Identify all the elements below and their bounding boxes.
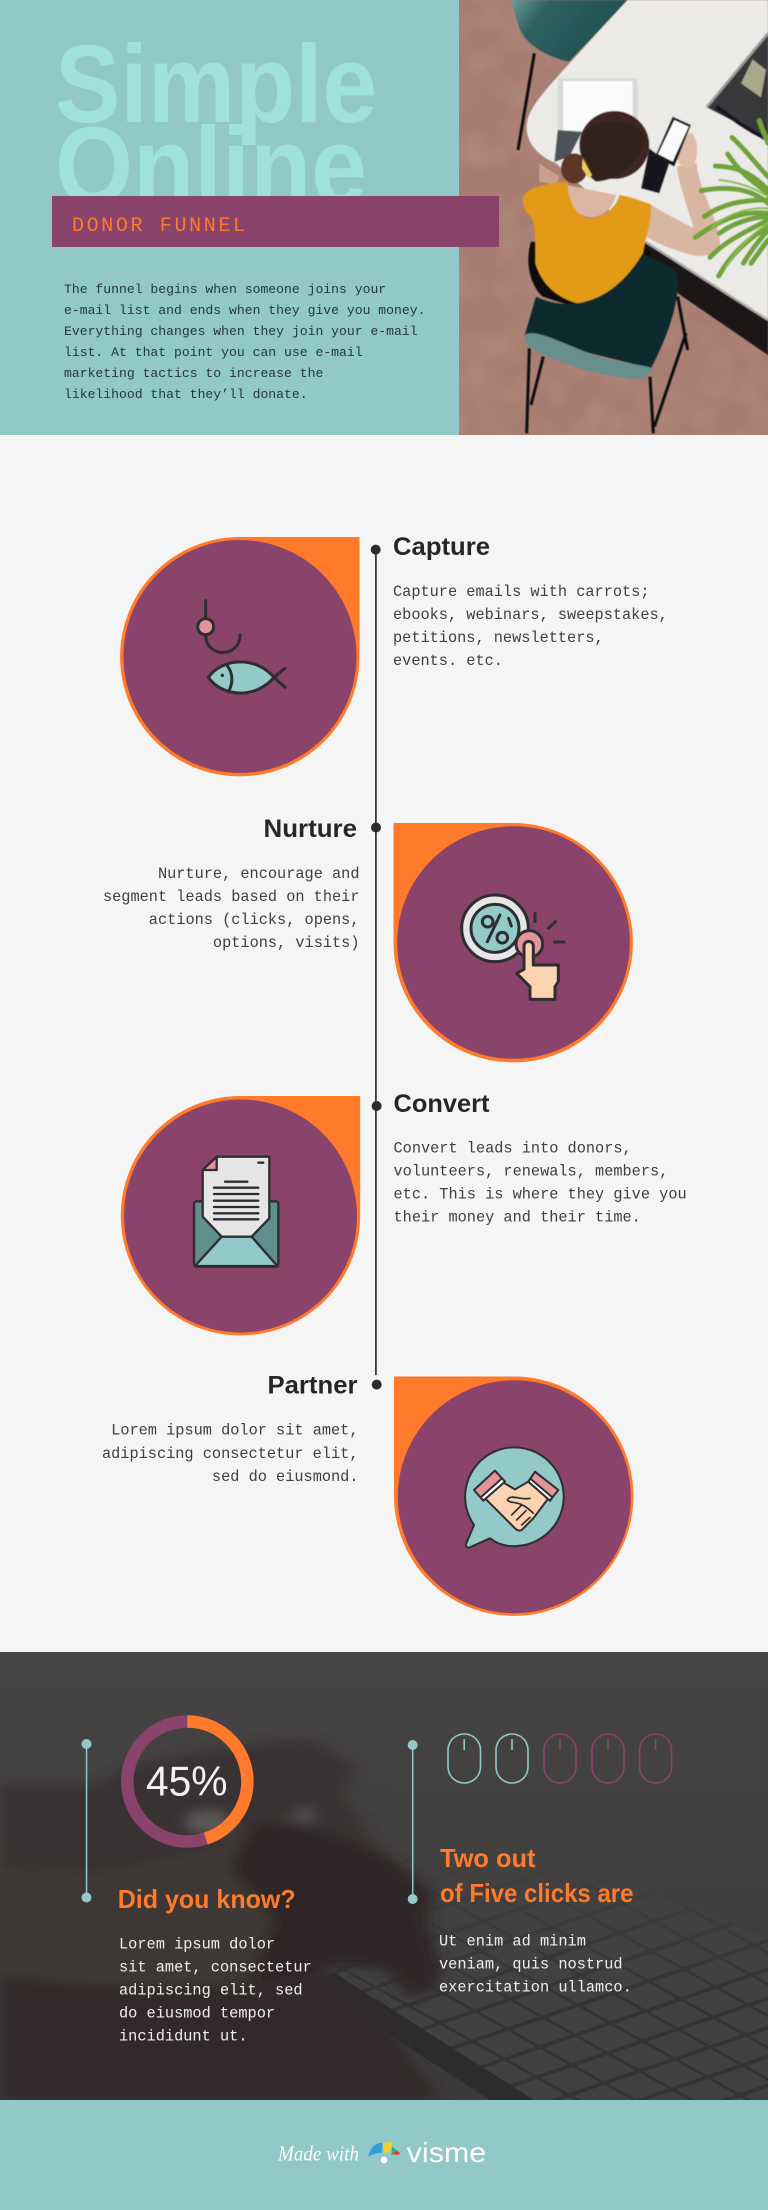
title: Simple Online: Online xyxy=(55,105,367,228)
left text block: sit amet, consectetur xyxy=(119,1958,312,1976)
icon: open envelope with letter xyxy=(194,1157,278,1267)
nurture text: options, visits) xyxy=(213,934,360,952)
heading: Did you know?: Did you know? xyxy=(118,1884,296,1914)
right text block: Ut enim ad minim xyxy=(439,1932,586,1950)
partner text: sed do eiusmond. xyxy=(212,1468,358,1486)
photo: hands on keyboard xyxy=(0,1652,768,2100)
step: Capture xyxy=(120,533,668,776)
capture text: ebooks, webinars, sweepstakes, xyxy=(393,606,668,624)
convert text: their money and their time. xyxy=(394,1208,641,1226)
left text block: Lorem ipsum dolor xyxy=(119,1936,275,1954)
right vertical marker xyxy=(408,1740,418,1904)
donut chart: 45%: 45% xyxy=(146,1758,228,1804)
convert text: Convert leads into donors, xyxy=(394,1140,632,1158)
subtitle band: Donor Funnel xyxy=(52,196,499,247)
right text block: exercitation ullamco. xyxy=(439,1978,632,1996)
footer xyxy=(0,2100,768,2210)
intro text: likelihood that they’ll donate. xyxy=(64,387,308,402)
nurture heading: Nurture xyxy=(264,815,357,843)
icons: five computer mice xyxy=(448,1734,672,1783)
left vertical marker xyxy=(82,1739,92,1902)
intro text: e-mail list and ends when they give you money. xyxy=(64,303,425,318)
convert text xyxy=(394,1140,687,1226)
stats panel xyxy=(0,1652,768,2100)
capture teardrop xyxy=(120,537,360,776)
intro text: list. At that point you can use e-mail xyxy=(64,345,363,360)
intro text: The funnel begins when someone joins your xyxy=(64,282,386,297)
title: Simple Online: Simple xyxy=(55,23,377,146)
capture heading: Capture xyxy=(393,533,490,561)
convert text: volunteers, renewals, members, xyxy=(394,1162,668,1180)
capture text: Capture emails with carrots; xyxy=(393,583,650,601)
donut chart: 45% xyxy=(127,1722,247,1842)
icon: visme logo xyxy=(368,2141,400,2163)
partner text: Lorem ipsum dolor sit amet, xyxy=(111,1422,358,1440)
left text block: incididunt ut. xyxy=(119,2028,248,2046)
nurture text: Nurture, encourage and xyxy=(158,865,360,883)
nurture text xyxy=(103,865,360,952)
step: Convert xyxy=(121,1090,687,1335)
capture text xyxy=(393,583,668,670)
nurture text: segment leads based on their xyxy=(103,888,360,906)
right text block: veniam, quis nostrud xyxy=(439,1956,623,1974)
nurture text: actions (clicks, opens, xyxy=(149,911,360,929)
step: Nurture xyxy=(103,815,633,1062)
visme wordmark: visme xyxy=(407,2137,486,2168)
partner teardrop xyxy=(394,1376,633,1616)
heading: Two out of Five clicks are: Two out xyxy=(440,1843,536,1873)
icon: hook and fish xyxy=(198,601,285,693)
icon: handshake speech bubble xyxy=(465,1447,564,1548)
convert text: etc. This is where they give you xyxy=(394,1186,687,1204)
left text block xyxy=(119,1936,312,2046)
right text block xyxy=(439,1932,632,1996)
heading: Two out of Five clicks are: of Five clicks are xyxy=(440,1878,634,1908)
nurture teardrop xyxy=(394,823,633,1062)
intro text: marketing tactics to increase the xyxy=(64,366,323,381)
heading: Two out of Five clicks are xyxy=(440,1843,634,1908)
icon: percent button with hand xyxy=(462,895,564,999)
left text block: adipiscing elit, sed xyxy=(119,1982,303,2000)
title: Simple Online xyxy=(55,23,377,228)
header panel xyxy=(0,0,768,435)
partner text xyxy=(102,1422,358,1486)
intro text xyxy=(64,282,425,402)
partner heading: Partner xyxy=(268,1372,358,1400)
step: Partner xyxy=(102,1372,633,1616)
funnel timeline xyxy=(371,545,382,1390)
intro text: Everything changes when they join your e-mail xyxy=(64,324,418,339)
subtitle band: Donor Funnel: DONOR FUNNEL xyxy=(72,215,245,238)
made with label: Made with xyxy=(277,2142,359,2166)
photo: woman at marble desk xyxy=(459,0,768,435)
capture text: events. etc. xyxy=(393,652,503,670)
capture text: petitions, newsletters, xyxy=(393,629,604,647)
partner text: adipiscing consectetur elit, xyxy=(102,1445,358,1463)
convert heading: Convert xyxy=(394,1090,490,1118)
convert teardrop xyxy=(121,1096,360,1335)
left text block: do eiusmod tempor xyxy=(119,2004,275,2022)
